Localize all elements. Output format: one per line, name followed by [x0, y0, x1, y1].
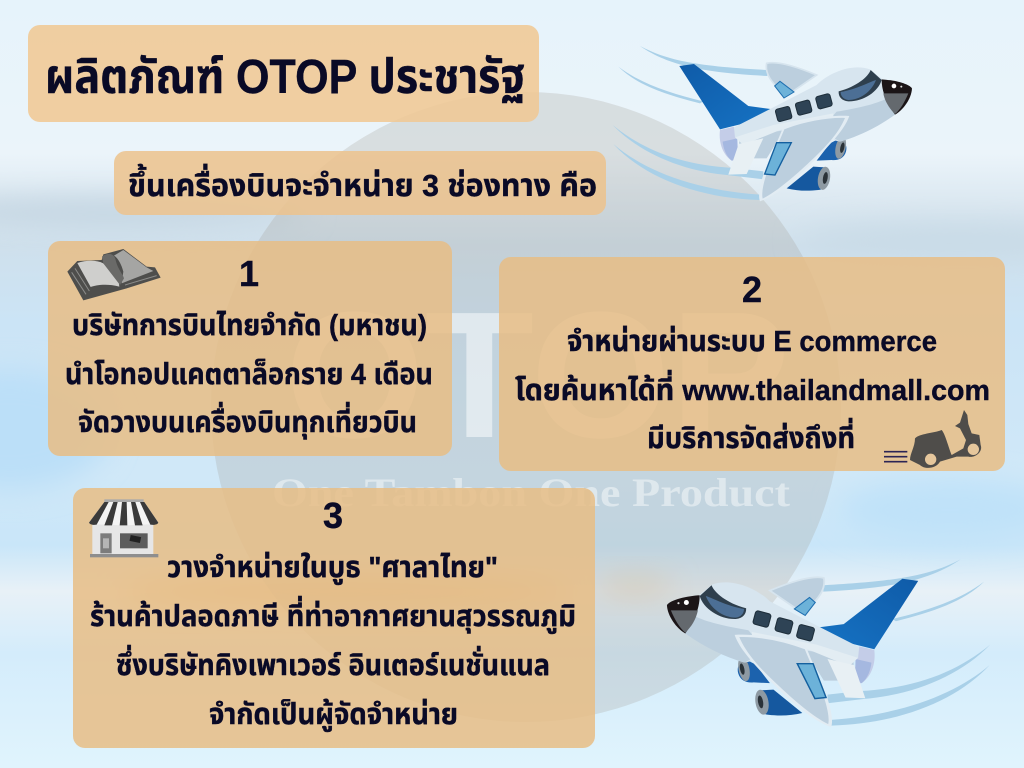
- icon: airplane bottom right: [667, 559, 990, 727]
- panel: channel 3: วางจำหน่ายในบูธ "ศาลาไทย": [167, 552, 498, 585]
- panel: channel 2: 2: [742, 269, 762, 310]
- icon: shop: [89, 499, 158, 557]
- panel: channel 3: ร้านค้าปลอดภาษี ที่ท่าอากาศยานสุวรรณภูมิ: [90, 595, 576, 634]
- panel: channel 3: [73, 488, 595, 748]
- icon: open book: [67, 249, 161, 300]
- OTOP logo watermark: OTOP: [285, 275, 790, 476]
- panel: channel 1: บริษัทการบินไทยจำกัด (มหาชน): [72, 310, 427, 342]
- panel: channel 3: จำกัดเป็นผู้จัดจำหน่าย: [209, 699, 458, 732]
- panel: channel 1: [48, 241, 452, 456]
- panel: channel 1: นำโอทอปแคตตาล็อกราย 4 เดือน: [65, 359, 433, 391]
- icon: delivery scooter: [884, 410, 981, 468]
- subtitle box: ขึ้นเครื่องบินจะจำหน่าย 3 ช่องทาง คือ: [128, 163, 597, 203]
- panel: channel 2: มีบริการจัดส่งถึงที่: [647, 417, 855, 455]
- panel: channel 3: ซึ่งบริษัทคิงเพาเวอร์ อินเตอร์เนชั่นแนล: [116, 644, 550, 682]
- OTOP logo watermark: One Tambon One Product: [272, 470, 791, 515]
- OTOP logo watermark: [211, 92, 841, 722]
- panel: channel 2: โดยค้นหาได้ที่ www.thailandmall.com: [515, 369, 990, 407]
- title box: ผลิตภัณฑ์ OTOP ประชารัฐ: [45, 51, 525, 104]
- subtitle box: [114, 151, 606, 215]
- panel: channel 1: 1: [239, 253, 259, 294]
- panel: channel 2: จำหน่ายผ่านระบบ E commerce: [567, 326, 937, 358]
- panel: channel 1: จัดวางบนเครื่องบินทุกเที่ยวบิน: [78, 401, 417, 439]
- icon: airplane top right: [613, 46, 912, 201]
- panel: channel 3: 3: [323, 495, 343, 536]
- title box: [28, 25, 539, 122]
- panel: channel 2: [499, 257, 1005, 471]
